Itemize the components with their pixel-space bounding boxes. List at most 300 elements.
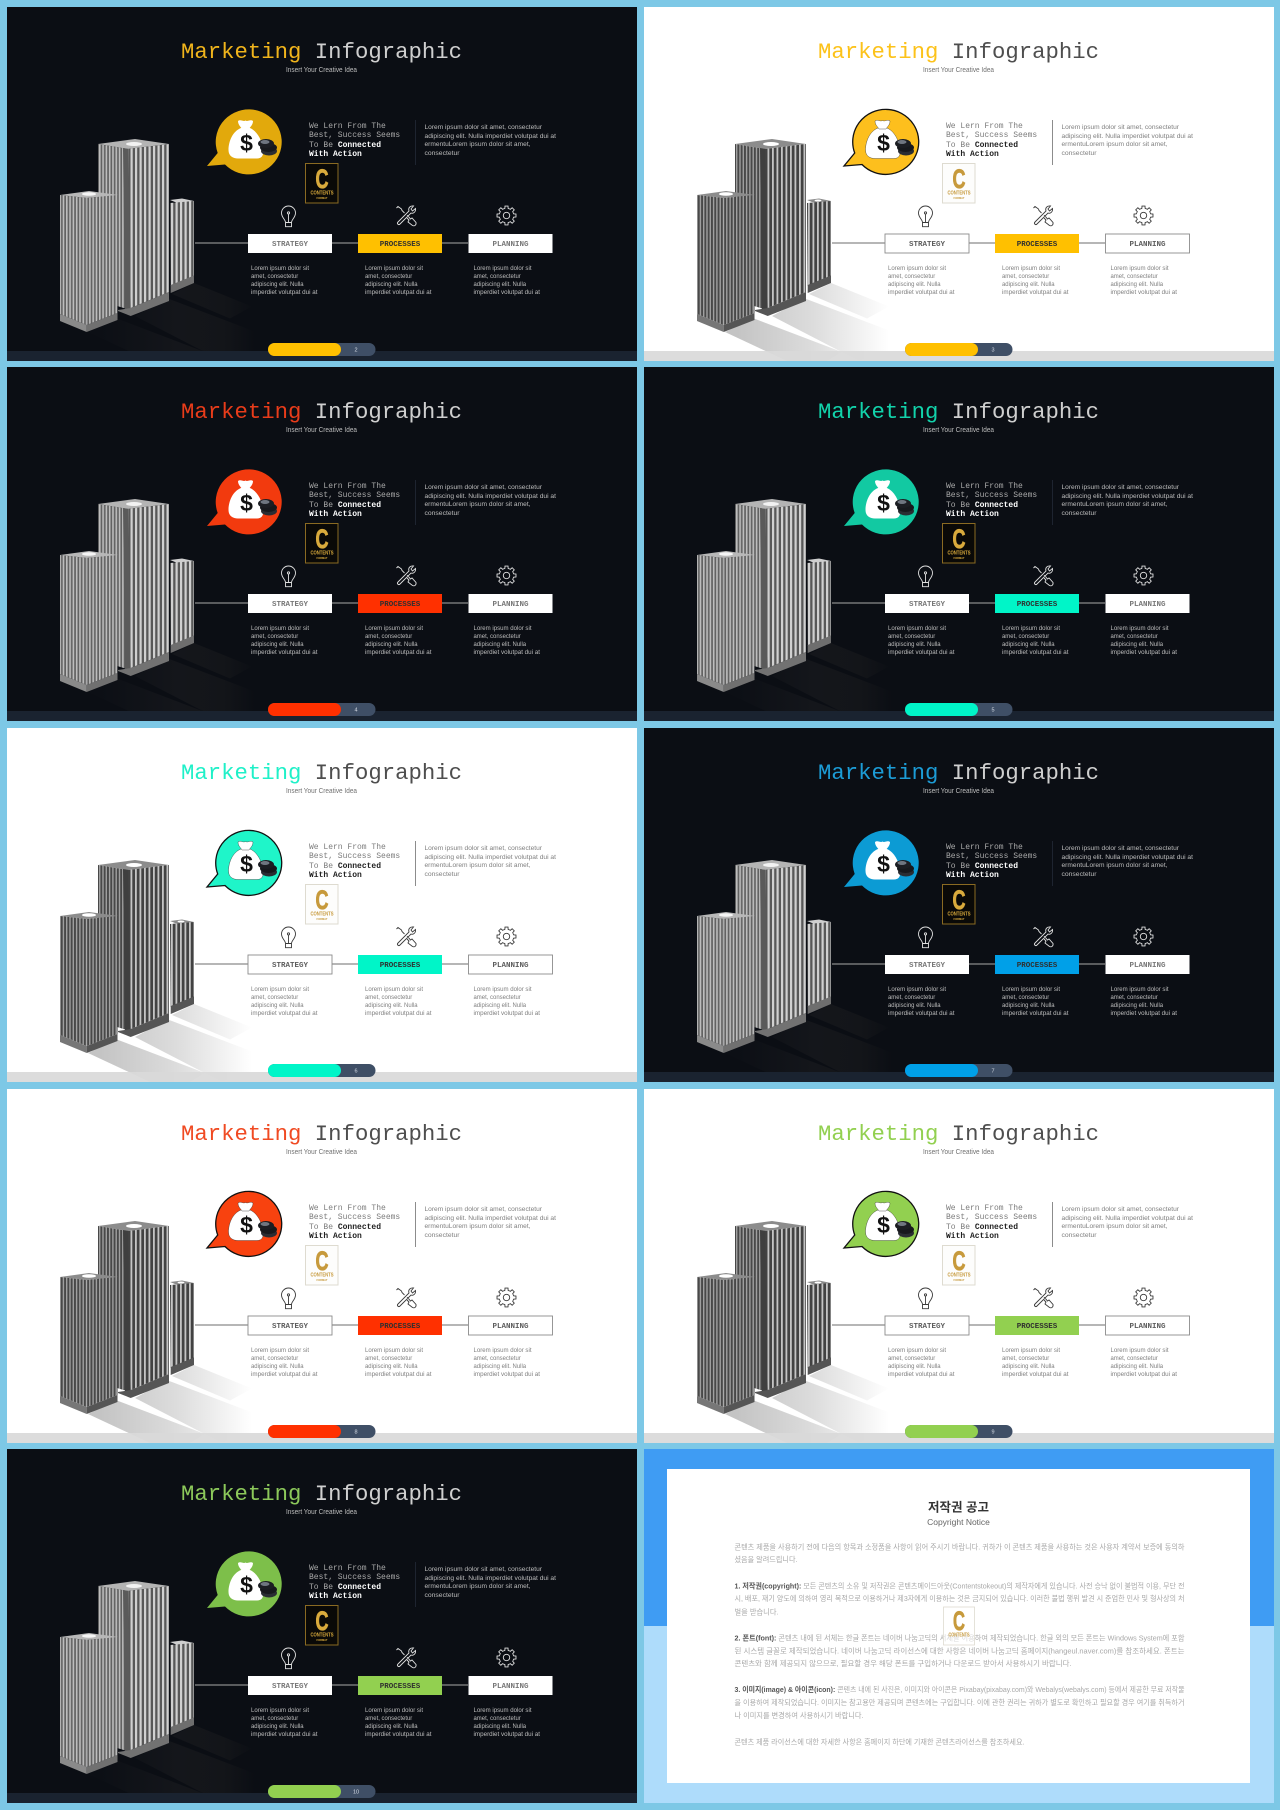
connector line <box>195 963 468 965</box>
quote text: To Be Connected <box>309 141 381 150</box>
quote text <box>946 1204 1037 1240</box>
icon: speech bubble with money bag <box>207 470 282 535</box>
box: planning <box>468 1676 552 1695</box>
description text <box>1061 124 1193 157</box>
text: processes: imperdiet volutpat dui at <box>365 649 432 656</box>
text: strategy: imperdiet volutpat dui at <box>251 289 318 296</box>
logo <box>306 524 338 563</box>
quote text: With Action <box>309 150 362 159</box>
icon: gear <box>497 566 516 585</box>
text: processes: adipiscing elit. Nulla <box>1002 1362 1055 1370</box>
text: planning <box>1110 1346 1177 1378</box>
text: planning: imperdiet volutpat dui at <box>474 1370 540 1378</box>
text: planning: imperdiet volutpat dui at <box>474 289 540 296</box>
divider <box>1051 120 1053 165</box>
quote text: Best, Success Seems <box>309 852 400 861</box>
box: planning: PLANNING <box>1129 601 1166 609</box>
box: strategy <box>248 1316 332 1334</box>
description text: adipiscing elit. Nulla imperdiet volutpat dui at <box>424 1214 556 1222</box>
logo: FORMAT <box>953 196 965 200</box>
icon: speech bubble with money bag: $ <box>240 1572 253 1598</box>
text: planning: amet, consectetur <box>474 994 522 1001</box>
text: planning <box>474 265 540 296</box>
quote text <box>309 122 400 159</box>
quote text: We Lern From The <box>309 122 386 131</box>
icon: light bulb <box>282 566 296 587</box>
text: strategy: amet, consectetur <box>251 1715 299 1722</box>
text: processes <box>365 625 432 656</box>
text: planning: Lorem ipsum dolor sit <box>474 625 532 632</box>
text: processes: Lorem ipsum dolor sit <box>365 1707 423 1714</box>
page pill: 4 <box>354 708 358 714</box>
text: strategy: Lorem ipsum dolor sit <box>251 625 309 632</box>
text: processes: adipiscing elit. Nulla <box>1002 641 1055 648</box>
title: Marketing Infographic <box>818 39 1099 65</box>
panel: slide 9 light green <box>644 1088 1274 1442</box>
description text: ermentuLorem ipsum dolor sit amet, <box>1061 141 1167 148</box>
logo: FORMAT <box>317 917 328 921</box>
box: strategy: STRATEGY <box>909 1322 945 1330</box>
title: Marketing Infographic <box>818 1120 1099 1146</box>
description text: adipiscing elit. Nulla imperdiet volutpat dui at <box>424 854 556 861</box>
description text: consectetur <box>424 871 460 878</box>
text: processes: imperdiet volutpat dui at <box>365 289 432 296</box>
footer band <box>644 711 1274 721</box>
text: strategy: adipiscing elit. Nulla <box>888 1362 941 1370</box>
logo: CONTENTS <box>947 551 971 557</box>
description text: adipiscing elit. Nulla imperdiet volutpat dui at <box>1061 1214 1193 1222</box>
box: processes <box>358 594 442 613</box>
description text <box>1061 845 1193 878</box>
description text: consectetur <box>1061 1232 1097 1238</box>
text: strategy <box>251 1346 318 1378</box>
text: processes: amet, consectetur <box>365 1354 413 1362</box>
text: processes: amet, consectetur <box>1002 273 1050 280</box>
icon: speech bubble with money bag <box>844 830 918 895</box>
logo: C <box>316 1246 328 1276</box>
description text: Lorem ipsum dolor sit amet, consectetur <box>1061 1206 1179 1212</box>
text: strategy: amet, consectetur <box>888 1354 936 1362</box>
title: Marketing Infographic <box>181 399 462 425</box>
notice section: font: 된 시스템 글꼴로 제작되었습니다. 네이버 나눔고딕 라이선스에 대한 사항은 네이버 나눔고딕 홈페이지(hangeul.naver.com)를 참조하세요. 폰트는 <box>734 1646 1184 1656</box>
logo: C <box>316 164 328 194</box>
notice intro: 셨음을 알려드립니다. <box>734 1554 797 1564</box>
footer band <box>644 1072 1274 1082</box>
description text: ermentuLorem ipsum dolor sit amet, <box>1061 862 1167 869</box>
title: Marketing Infographic <box>181 1120 462 1146</box>
text: planning <box>474 625 540 656</box>
page pill <box>905 1424 1012 1438</box>
box: strategy <box>248 1676 332 1695</box>
text: planning: adipiscing elit. Nulla <box>474 1002 526 1009</box>
quote text: We Lern From The <box>309 482 386 491</box>
box: processes <box>358 1676 442 1695</box>
description text: ermentuLorem ipsum dolor sit amet, <box>1061 501 1167 508</box>
text: processes: imperdiet volutpat dui at <box>1002 1370 1068 1378</box>
text: planning: adipiscing elit. Nulla <box>1110 1362 1163 1370</box>
text: processes: imperdiet volutpat dui at <box>365 1731 432 1738</box>
text: processes: imperdiet volutpat dui at <box>1002 289 1068 296</box>
description text <box>424 484 556 517</box>
text: processes <box>365 986 432 1017</box>
skyscrapers illustration <box>697 1220 831 1414</box>
box: planning: PLANNING <box>492 962 529 970</box>
text: strategy: adipiscing elit. Nulla <box>888 281 941 288</box>
text: processes: imperdiet volutpat dui at <box>1002 649 1068 656</box>
panel: slide 5 dark teal <box>644 367 1274 721</box>
background split blue <box>644 1449 1274 1803</box>
text: planning: amet, consectetur <box>1110 633 1158 640</box>
description text: Lorem ipsum dolor sit amet, consectetur <box>424 484 543 491</box>
title: Marketing Infographic <box>818 760 1099 786</box>
panel: slide 2 dark yellow <box>7 7 637 361</box>
text: processes <box>1002 625 1068 656</box>
box: strategy: STRATEGY <box>272 1683 308 1691</box>
description text <box>424 845 556 878</box>
description text: ermentuLorem ipsum dolor sit amet, <box>424 501 531 508</box>
footer band <box>644 351 1274 361</box>
page pill <box>268 703 376 716</box>
text: strategy: imperdiet volutpat dui at <box>888 289 954 296</box>
notice subheading: Copyright Notice <box>927 1517 990 1527</box>
divider <box>414 841 416 886</box>
box: strategy: STRATEGY <box>272 601 308 609</box>
logo: FORMAT <box>953 556 965 560</box>
box: strategy <box>885 594 969 613</box>
box: planning: PLANNING <box>1129 241 1166 249</box>
box: processes: PROCESSES <box>1016 601 1057 609</box>
description text: consectetur <box>424 150 460 157</box>
connector line <box>832 602 1105 604</box>
logo: C <box>952 885 965 915</box>
logo <box>306 1606 338 1645</box>
text: strategy: Lorem ipsum dolor sit <box>888 1346 946 1354</box>
description text: Lorem ipsum dolor sit amet, consectetur <box>424 1206 543 1212</box>
text: planning: amet, consectetur <box>1110 1354 1158 1362</box>
box: processes: PROCESSES <box>380 1683 421 1691</box>
box: processes <box>995 1316 1079 1334</box>
text: planning: imperdiet volutpat dui at <box>1110 1370 1177 1378</box>
logo: CONTENTS <box>947 190 971 196</box>
text: processes: amet, consectetur <box>365 1715 413 1722</box>
text: processes: adipiscing elit. Nulla <box>1002 1002 1055 1009</box>
connector line <box>195 1324 468 1326</box>
subtitle: Insert Your Creative Idea <box>923 427 994 434</box>
page pill: 8 <box>354 1429 358 1435</box>
box: processes <box>358 955 442 974</box>
logo: C <box>316 885 328 915</box>
panel: slide 6 light teal <box>7 728 637 1082</box>
title: Marketing Infographic <box>181 1481 462 1507</box>
text: strategy: Lorem ipsum dolor sit <box>251 986 309 993</box>
logo: FORMAT <box>953 917 965 921</box>
quote text: With Action <box>309 1592 362 1601</box>
box: processes: PROCESSES <box>1016 241 1057 249</box>
icon: tools <box>1033 1287 1053 1307</box>
box: processes: PROCESSES <box>380 1322 421 1330</box>
text: processes: adipiscing elit. Nulla <box>365 1723 418 1730</box>
quote text: Best, Success Seems <box>946 491 1037 500</box>
text: processes: adipiscing elit. Nulla <box>365 641 418 648</box>
icon: speech bubble with money bag: $ <box>240 490 253 516</box>
icon: gear <box>1134 927 1153 946</box>
icon: light bulb <box>918 927 932 948</box>
icon: light bulb <box>918 206 932 227</box>
text: processes: adipiscing elit. Nulla <box>365 1002 418 1009</box>
text: processes: imperdiet volutpat dui at <box>365 1010 432 1017</box>
logo: FORMAT <box>317 196 328 200</box>
white notice card <box>666 1469 1250 1783</box>
box: processes <box>995 234 1079 253</box>
quote text: To Be Connected <box>309 1222 381 1232</box>
quote text <box>946 843 1037 880</box>
quote text: Best, Success Seems <box>946 1212 1037 1222</box>
quote text: With Action <box>309 1232 362 1240</box>
box: strategy <box>248 955 332 974</box>
building shadows <box>88 1364 280 1442</box>
quote text: We Lern From The <box>946 843 1023 852</box>
notice section: image and icon: 3. 이미지(image) & 아이콘(icon): 콘텐츠 내에 된 사진은, 이미지와 아이콘은 Pixabay(pixabay.com)와 Webalys(webalys.com) 등에서 제공한 무료 저작물 <box>734 1684 1184 1694</box>
building shadows <box>88 283 280 361</box>
building shadows <box>725 643 917 721</box>
logo <box>943 1606 974 1645</box>
text: strategy: imperdiet volutpat dui at <box>888 649 954 656</box>
text: processes <box>365 1346 432 1378</box>
text: planning: adipiscing elit. Nulla <box>474 1723 526 1730</box>
skyscrapers illustration <box>60 860 194 1053</box>
page pill <box>268 343 376 356</box>
logo: CONTENTS <box>310 912 334 918</box>
text: strategy <box>251 625 318 656</box>
text: processes: Lorem ipsum dolor sit <box>365 1346 423 1354</box>
text: strategy: imperdiet volutpat dui at <box>888 1010 954 1017</box>
description text: consectetur <box>1061 510 1097 517</box>
subtitle: Insert Your Creative Idea <box>286 788 357 795</box>
icon: tools <box>1033 206 1053 226</box>
icon: light bulb <box>918 566 932 587</box>
notice section: font <box>734 1632 1184 1668</box>
footer band <box>7 711 637 721</box>
description text <box>1061 1206 1193 1238</box>
page pill <box>268 1064 376 1077</box>
building shadows <box>725 283 917 361</box>
icon: light bulb <box>282 1288 296 1308</box>
text: planning: amet, consectetur <box>474 1354 522 1362</box>
description text: Lorem ipsum dolor sit amet, consectetur <box>424 124 543 131</box>
text: strategy: amet, consectetur <box>251 273 299 280</box>
notice section: font: 콘텐츠와 함께 제공되지 않으므로, 필요할 경우 해당 폰트를 구입하거나 다운로드 받아서 사용하시기 바랍니다. <box>734 1658 1071 1668</box>
text: processes: Lorem ipsum dolor sit <box>1002 625 1060 632</box>
text: processes: imperdiet volutpat dui at <box>1002 1010 1068 1017</box>
footer band <box>7 1432 637 1442</box>
text: strategy: adipiscing elit. Nulla <box>251 1723 304 1730</box>
text: processes <box>1002 265 1068 296</box>
description text <box>1061 484 1193 517</box>
icon: speech bubble with money bag <box>207 1551 282 1616</box>
notice section: image and icon <box>734 1684 1184 1720</box>
text: planning: Lorem ipsum dolor sit <box>1110 265 1168 272</box>
text: strategy <box>888 1346 954 1378</box>
quote text: With Action <box>309 871 362 880</box>
icon: tools <box>396 1287 416 1307</box>
text: planning: Lorem ipsum dolor sit <box>1110 1346 1168 1354</box>
text: strategy <box>888 625 954 656</box>
quote text: To Be Connected <box>946 141 1018 150</box>
text: planning <box>1110 986 1177 1017</box>
connector line <box>195 1684 468 1686</box>
text: planning: Lorem ipsum dolor sit <box>474 1346 532 1354</box>
text: strategy <box>888 265 954 296</box>
subtitle: Insert Your Creative Idea <box>923 67 994 74</box>
notice section: image and icon: 나 이미지를 변경하여 사용하시기 바랍니다. <box>734 1710 863 1720</box>
page pill: 9 <box>991 1429 994 1435</box>
page pill: 10 <box>353 1790 359 1796</box>
text: planning <box>1110 265 1177 296</box>
box: planning <box>1105 594 1189 613</box>
logo: FORMAT <box>953 1278 965 1282</box>
skyscrapers illustration <box>697 139 831 332</box>
description text: adipiscing elit. Nulla imperdiet volutpat dui at <box>1061 854 1193 861</box>
text: processes: Lorem ipsum dolor sit <box>365 986 423 993</box>
box: processes: PROCESSES <box>380 241 421 249</box>
description text: consectetur <box>424 510 460 517</box>
description text: Lorem ipsum dolor sit amet, consectetur <box>424 1566 543 1573</box>
page pill <box>268 1424 376 1438</box>
text: processes <box>1002 986 1068 1017</box>
building shadows <box>725 1004 917 1082</box>
text: planning: Lorem ipsum dolor sit <box>1110 625 1168 632</box>
notice heading: 저작권 공고 <box>928 1500 988 1514</box>
connector line <box>195 242 468 244</box>
description text: consectetur <box>1061 150 1097 157</box>
logo <box>306 164 338 203</box>
connector line <box>832 1324 1105 1326</box>
box: processes <box>995 594 1079 613</box>
subtitle: Insert Your Creative Idea <box>286 67 357 74</box>
icon: speech bubble with money bag: $ <box>240 1212 253 1238</box>
quote text: To Be Connected <box>946 501 1018 510</box>
box: processes: PROCESSES <box>380 962 421 970</box>
description text: Lorem ipsum dolor sit amet, consectetur <box>1061 124 1179 131</box>
notice section: copyright: 벌을 받습니다. <box>734 1606 778 1616</box>
text: processes: amet, consectetur <box>1002 994 1050 1001</box>
page pill <box>905 1064 1012 1077</box>
subtitle: Insert Your Creative Idea <box>286 1509 357 1516</box>
quote text: Best, Success Seems <box>946 852 1037 861</box>
quote text: With Action <box>946 510 999 519</box>
text: strategy: Lorem ipsum dolor sit <box>888 986 946 993</box>
box: strategy <box>885 234 969 253</box>
description text: adipiscing elit. Nulla imperdiet volutpat dui at <box>424 493 556 500</box>
quote text <box>309 843 400 880</box>
subtitle: Insert Your Creative Idea <box>286 427 357 434</box>
divider <box>1051 480 1053 525</box>
logo: C <box>952 164 965 194</box>
skyscrapers illustration <box>697 499 831 692</box>
divider <box>414 120 416 165</box>
quote text: We Lern From The <box>309 1204 386 1212</box>
text: processes <box>1002 1346 1068 1378</box>
logo: CONTENTS <box>310 190 334 196</box>
logo: CONTENTS <box>947 912 971 918</box>
icon: light bulb <box>282 206 296 227</box>
quote text: Best, Success Seems <box>309 1573 400 1582</box>
text: strategy: Lorem ipsum dolor sit <box>251 265 309 272</box>
notice intro <box>734 1542 1184 1564</box>
notice footer line: 콘텐츠 제품 라이선스에 대한 자세한 사항은 홈페이지 하단에 기재한 콘텐츠라이선스를 참조하세요. <box>734 1736 1024 1746</box>
connector line <box>832 963 1105 965</box>
box: processes: PROCESSES <box>1016 962 1057 970</box>
text: processes: amet, consectetur <box>1002 1354 1050 1362</box>
logo: CONTENTS <box>310 551 334 557</box>
text: processes: amet, consectetur <box>365 273 413 280</box>
icon: tools <box>1033 566 1053 586</box>
box: strategy: STRATEGY <box>909 601 945 609</box>
text: strategy: adipiscing elit. Nulla <box>888 641 941 648</box>
icon: gear <box>497 1648 516 1667</box>
building shadows <box>725 1364 917 1442</box>
text: strategy: adipiscing elit. Nulla <box>251 1002 304 1009</box>
text: planning: amet, consectetur <box>474 1715 522 1722</box>
text: strategy: Lorem ipsum dolor sit <box>251 1346 309 1354</box>
logo: CONTENTS <box>310 1632 334 1638</box>
text: processes <box>365 1707 432 1738</box>
box: planning: PLANNING <box>492 1322 529 1330</box>
icon: tools <box>396 566 416 586</box>
text: strategy: imperdiet volutpat dui at <box>251 1010 318 1017</box>
box: strategy: STRATEGY <box>909 962 945 970</box>
footer band <box>7 1793 637 1803</box>
description text: Lorem ipsum dolor sit amet, consectetur <box>1061 845 1179 852</box>
text: planning: adipiscing elit. Nulla <box>474 641 526 648</box>
title: Marketing Infographic <box>181 39 462 65</box>
quote text: Best, Success Seems <box>309 491 400 500</box>
icon: speech bubble with money bag: $ <box>877 851 890 877</box>
text: strategy: adipiscing elit. Nulla <box>888 1002 941 1009</box>
icon: speech bubble with money bag <box>207 109 282 174</box>
subtitle: Insert Your Creative Idea <box>923 788 994 795</box>
icon: light bulb <box>918 1288 932 1308</box>
description text: ermentuLorem ipsum dolor sit amet, <box>424 141 531 148</box>
description text: adipiscing elit. Nulla imperdiet volutpat dui at <box>1061 133 1193 140</box>
skyscrapers illustration <box>60 499 194 692</box>
icon: speech bubble with money bag <box>207 830 282 895</box>
text: planning: Lorem ipsum dolor sit <box>474 265 532 272</box>
box: planning <box>468 594 552 613</box>
description text: ermentuLorem ipsum dolor sit amet, <box>424 1583 531 1590</box>
text: processes: Lorem ipsum dolor sit <box>1002 1346 1060 1354</box>
text: processes: imperdiet volutpat dui at <box>365 1370 432 1378</box>
text: processes: Lorem ipsum dolor sit <box>365 265 423 272</box>
box: planning: PLANNING <box>492 1683 529 1691</box>
text: strategy: amet, consectetur <box>888 273 936 280</box>
text: planning: Lorem ipsum dolor sit <box>474 1707 532 1714</box>
box: strategy: STRATEGY <box>272 962 308 970</box>
panel: slide 7 dark blue <box>644 728 1274 1082</box>
quote text: We Lern From The <box>946 122 1023 131</box>
box: planning <box>1105 955 1189 974</box>
icon: gear <box>497 206 516 225</box>
logo: CONTENTS <box>947 1272 971 1278</box>
notice section: image and icon: 을 이용하여 제작되었습니다. 이미지는 참고용만 제공되며 콘텐츠에는 구입합니다. 이에 관한 권리는 귀하가 별도로 확인하고 필요할 경우 여기를 취득하거 <box>734 1697 1184 1707</box>
icon: tools <box>396 1648 416 1668</box>
page pill: 5 <box>991 708 994 714</box>
text: planning: adipiscing elit. Nulla <box>1110 641 1163 648</box>
quote text: To Be Connected <box>946 1222 1018 1232</box>
icon: speech bubble with money bag <box>844 1191 918 1256</box>
text: planning: imperdiet volutpat dui at <box>1110 1010 1177 1017</box>
text: strategy: imperdiet volutpat dui at <box>888 1370 954 1378</box>
